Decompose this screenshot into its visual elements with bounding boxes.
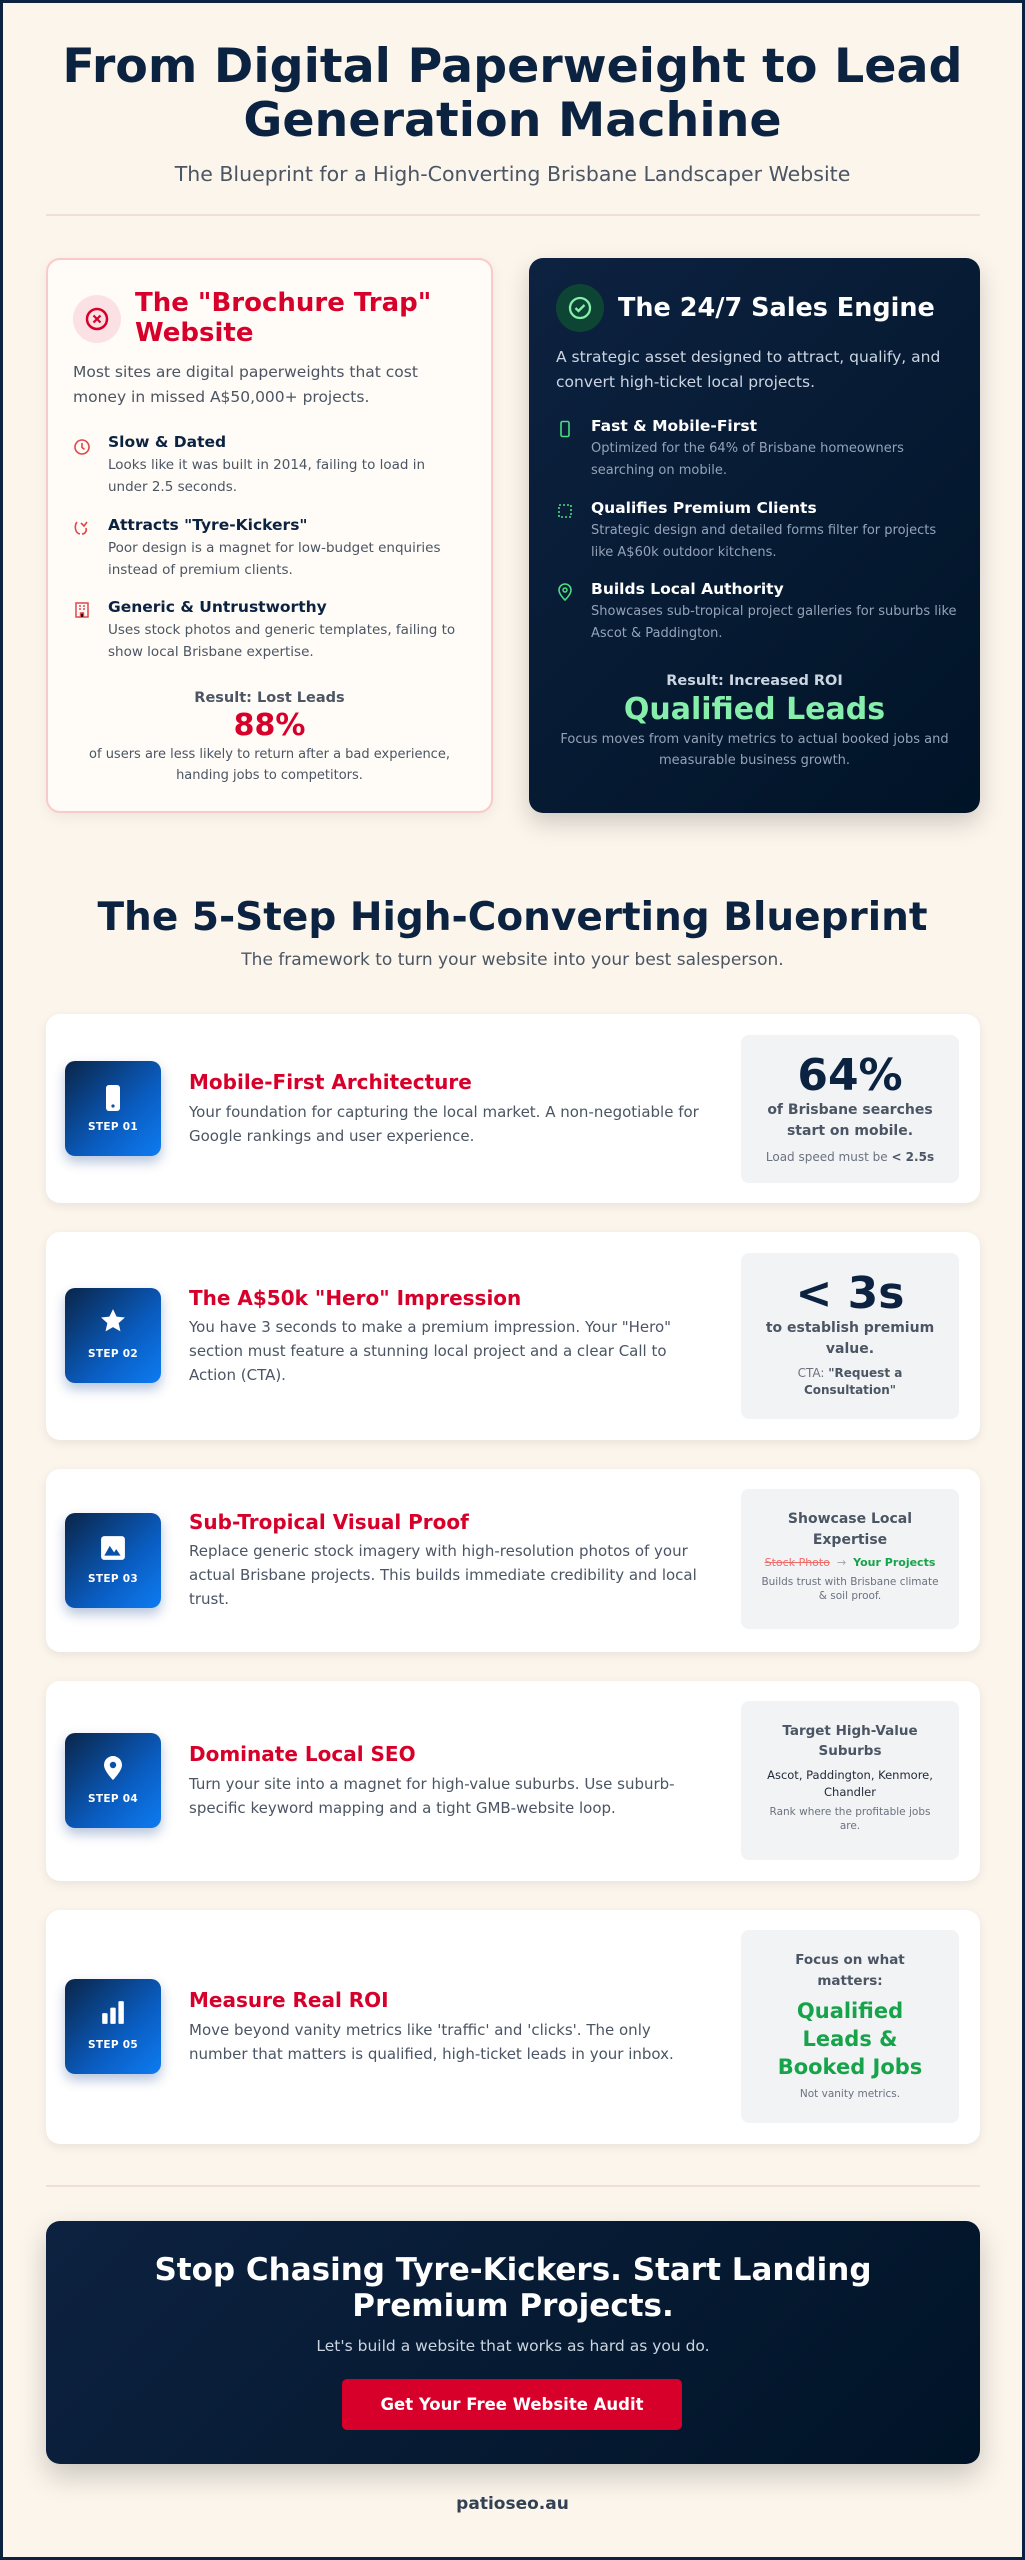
panel: sales engine: Strategic design and detailed forms filter for projects like A$60k outdoor kitchens. — [591, 523, 936, 560]
item: slow — [74, 433, 425, 495]
stat: qualified leads — [741, 1930, 959, 2123]
panel: sales engine: Fast & Mobile-First — [591, 417, 757, 435]
result: qualified leads: Focus moves from vanity metrics to actual booked jobs and measurable business growth. — [560, 732, 949, 768]
heading: The 24/7 Sales Engine — [618, 293, 935, 323]
result: qualified leads: Result: Increased ROI — [666, 673, 843, 689]
CTA heading: Stop Chasing Tyre-Kickers. Start Landing Premium Projects. — [154, 2252, 872, 2324]
icon: check circle — [556, 284, 604, 332]
step 5 card — [46, 1910, 980, 2144]
description: You have 3 seconds to make a premium impression. Your "Hero" section must feature a stunning local project and a clear Call to Action (CTA). — [189, 1318, 671, 1384]
result: lost leads: of users are less likely to return after a bad experience, handing jobs to competitors. — [89, 747, 450, 783]
result: lost leads: 88% — [234, 708, 305, 743]
stat: showcase: Builds trust with Brisbane climate & soil proof. — [761, 1576, 939, 1602]
panel: brochure trap: Looks like it was built in 2014, failing to load in under 2.5 seconds. — [108, 457, 425, 495]
section heading: 5-step: The 5-Step High-Converting Blueprint — [97, 895, 928, 940]
description: Move beyond vanity metrics like 'traffic' and 'clicks'. The only number that matters is qualified, high-ticket leads in your inbox. — [189, 2021, 674, 2063]
result: lost leads: Result: Lost Leads — [194, 690, 345, 706]
stat: 64%: Load speed must be < 2.5s — [766, 1150, 934, 1164]
icon: image tile: STEP 03 — [88, 1573, 138, 1585]
panel: sales engine: Builds Local Authority — [591, 580, 784, 598]
footer: patioseo.au — [456, 2494, 569, 2514]
result: qualified leads: Qualified Leads — [624, 692, 885, 727]
step 2 card — [46, 1232, 980, 1440]
heading: The A$50k "Hero" Impression — [189, 1286, 521, 1310]
icon: chart tile: STEP 05 — [88, 2039, 138, 2051]
CTA button: Get Your Free Website Audit — [380, 2395, 644, 2414]
stat: qualified leads: Not vanity metrics. — [800, 2088, 900, 2100]
step 4 card — [46, 1681, 980, 1881]
stat: suburbs: Ascot, Paddington, Kenmore, Chandler — [767, 1768, 933, 1799]
heading: Mobile-First Architecture — [189, 1070, 472, 1094]
panel: sales engine: Showcases sub-tropical project galleries for suburbs like Ascot & Paddington. — [591, 604, 957, 641]
item: local authority — [558, 580, 957, 641]
stat: suburbs: Target High-Value Suburbs — [782, 1723, 918, 1759]
item: generic — [75, 598, 455, 660]
result: lost leads — [89, 690, 450, 783]
stat: 3s: to establish premium value. — [766, 1320, 934, 1357]
CTA subtext: Let's build a website that works as hard as you do. — [316, 2337, 710, 2355]
icon: phone tile: STEP 01 — [88, 1121, 138, 1133]
item: fast mobile — [560, 417, 904, 478]
icon: star tile — [65, 1288, 161, 1383]
stat: 3s: CTA: "Request a Consultation" — [798, 1366, 902, 1397]
icon: image tile — [65, 1513, 161, 1608]
heading: Sub-Tropical Visual Proof — [189, 1510, 469, 1534]
CTA button — [342, 2379, 682, 2430]
intro text: A strategic asset designed to attract, qualify, and convert high-ticket local projects. — [556, 348, 940, 391]
stat: 64%: of Brisbane searches start on mobile. — [767, 1102, 933, 1139]
icon: pin tile — [65, 1733, 161, 1828]
step 1 card — [46, 1014, 980, 1203]
stat: qualified leads: Focus on what matters: — [795, 1952, 905, 1989]
CTA panel — [46, 2221, 980, 2464]
description: Replace generic stock imagery with high-resolution photos of your actual Brisbane projects. This builds immediate credibility and local trust. — [189, 1542, 697, 1608]
item: qualifies — [558, 499, 936, 560]
stat: 3s: < 3s — [796, 1268, 904, 1319]
heading: Measure Real ROI — [189, 1988, 389, 2012]
icon: x circle — [73, 295, 121, 343]
description: Your foundation for capturing the local market. A non-negotiable for Google rankings and user experience. — [189, 1103, 699, 1145]
stat: showcase: Stock Photo → Your Projects — [765, 1556, 935, 1569]
panel: sales engine: Qualifies Premium Clients — [591, 499, 817, 517]
panel: brochure trap — [46, 258, 493, 813]
panel: brochure trap: Poor design is a magnet for low-budget enquiries instead of premium clients. — [108, 540, 440, 578]
stat: showcase: Showcase Local Expertise — [788, 1511, 912, 1548]
step 3 card — [46, 1469, 980, 1652]
description: Turn your site into a magnet for high-value suburbs. Use suburb-specific keyword mapping and a tight GMB-website loop. — [189, 1775, 675, 1817]
result: qualified leads — [560, 673, 949, 768]
section subtitle: The framework to turn your website into your best salesperson. — [241, 950, 784, 970]
stat: 64%: 64% — [797, 1050, 903, 1101]
icon: chart tile — [65, 1979, 161, 2074]
stat: suburbs — [741, 1701, 959, 1860]
panel: brochure trap: Attracts "Tyre-Kickers" — [108, 516, 308, 534]
intro text: Most sites are digital paperweights that cost money in missed A$50,000+ projects. — [73, 363, 418, 406]
icon: pin tile: STEP 04 — [88, 1793, 138, 1805]
panel: sales engine — [529, 258, 980, 813]
stat: suburbs: Rank where the profitable jobs are. — [770, 1806, 930, 1832]
title: From Digital Paperweight to Lead Generation Machine — [62, 39, 963, 148]
panel: brochure trap: Slow & Dated — [108, 433, 226, 451]
icon: star tile: STEP 02 — [88, 1348, 138, 1360]
heading: Dominate Local SEO — [189, 1742, 416, 1766]
stat: showcase — [741, 1489, 959, 1629]
panel: brochure trap: Uses stock photos and generic templates, failing to show local Brisbane expertise. — [108, 622, 455, 660]
subtitle: The Blueprint for a High-Converting Brisbane Landscaper Website — [175, 162, 850, 186]
heading: The "Brochure Trap" Website — [135, 288, 431, 348]
stat: 64% — [741, 1035, 959, 1183]
stat: 3s — [741, 1253, 959, 1419]
panel: brochure trap: Generic & Untrustworthy — [108, 598, 327, 616]
icon: phone tile — [65, 1061, 161, 1156]
item: tyre kickers — [74, 516, 440, 578]
panel: sales engine: Optimized for the 64% of Brisbane homeowners searching on mobile. — [591, 441, 904, 478]
stat: qualified leads: Qualified Leads & Booked Jobs — [778, 1999, 922, 2079]
